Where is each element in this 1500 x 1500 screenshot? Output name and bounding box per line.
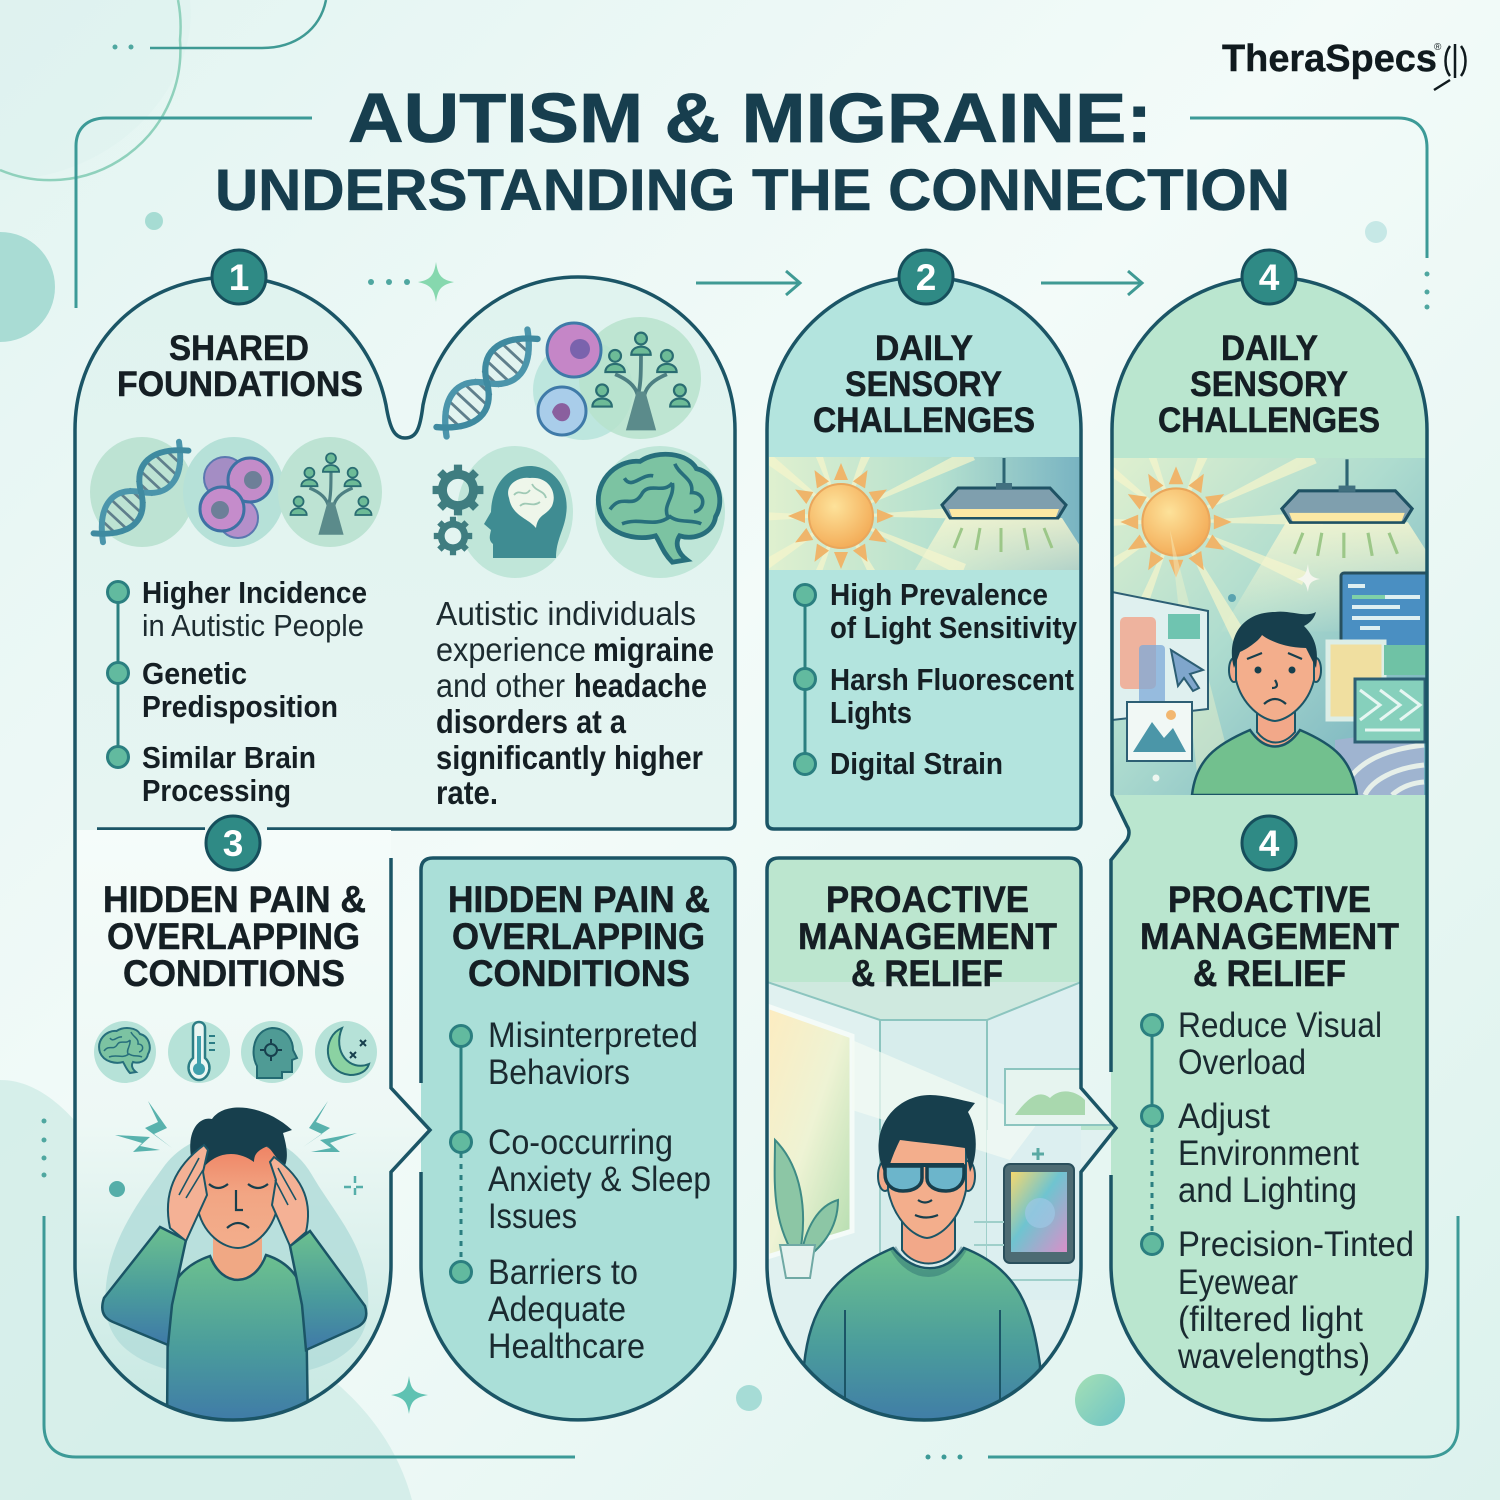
panel: daily sensory challenges text — [765, 277, 1083, 831]
badge: number 2 — [899, 250, 953, 304]
list: shared foundations: Similar Brain — [142, 740, 316, 775]
heading: hidden pain and overlapping conditions: CONDITIONS — [123, 953, 345, 994]
badge: number 3: 3 — [223, 823, 243, 864]
list: hidden pain: Issues — [488, 1197, 577, 1236]
heading: daily sensory challenges: DAILY — [1221, 329, 1318, 368]
list: hidden pain: Anxiety & Sleep — [488, 1160, 711, 1199]
text block: autistic individuals summary: significantly higher — [436, 739, 703, 776]
logo: TheraSpecs: ® — [1434, 42, 1442, 53]
text block: autistic individuals summary: Autistic individuals — [436, 595, 696, 632]
heading: hidden pain and overlapping conditions: HIDDEN PAIN & — [103, 879, 366, 920]
text block: autistic individuals summary: migraine — [593, 631, 714, 668]
heading: daily sensory challenges: DAILY — [875, 329, 973, 368]
icon: moon and stars — [315, 1021, 377, 1083]
icon: DNA circle — [86, 434, 196, 550]
list: proactive management: (filtered light — [1178, 1300, 1363, 1339]
arrow — [1041, 271, 1142, 295]
list: sensory challenges: Harsh Fluorescent — [830, 662, 1074, 697]
arrow — [696, 271, 800, 295]
heading: daily sensory challenges: CHALLENGES — [1158, 401, 1380, 440]
list: hidden pain: Behaviors — [488, 1053, 630, 1092]
list: sensory challenges: Digital Strain — [830, 746, 1003, 781]
heading: shared foundations — [117, 329, 363, 404]
list: hidden pain: Misinterpreted — [488, 1016, 698, 1055]
heading: daily sensory challenges: SENSORY — [1190, 365, 1348, 404]
heading: shared foundations: FOUNDATIONS — [117, 365, 363, 404]
badge: number 2: 2 — [916, 257, 936, 298]
heading: proactive management and relief: & RELIEF — [851, 953, 1003, 994]
heading: daily sensory challenges: CHALLENGES — [813, 401, 1035, 440]
badge: number 4: 4 — [1259, 257, 1280, 298]
illustration: sun and fluorescent lamp — [769, 457, 1079, 570]
heading: hidden pain and overlapping conditions: OVERLAPPING — [107, 916, 360, 957]
list: shared foundations: Genetic — [142, 656, 247, 691]
icon: family tree circle — [278, 437, 382, 547]
list: shared foundations: in Autistic People — [142, 608, 364, 643]
heading: hidden pain and overlapping conditions: CONDITIONS — [468, 953, 690, 994]
list: proactive management: Environment — [1178, 1134, 1359, 1173]
panel: shared foundations — [75, 277, 735, 830]
heading: hidden pain and overlapping conditions — [448, 879, 710, 994]
icon: brain circle — [595, 446, 725, 578]
badge: number 1 — [212, 250, 266, 304]
title: AUTISM & MIGRAINE: — [348, 79, 1152, 157]
icon: DNA large — [428, 322, 546, 444]
text block: autistic individuals summary — [436, 595, 714, 811]
heading: daily sensory challenges: SENSORY — [845, 365, 1002, 404]
list: proactive management: Overload — [1178, 1043, 1306, 1082]
illustration: calm person in tinted glasses — [767, 982, 1120, 1430]
panel: hidden pain illustration (white) — [75, 830, 430, 1425]
list: proactive management: and Lighting — [1178, 1171, 1357, 1210]
heading: proactive management and relief: MANAGEMENT — [1140, 916, 1399, 957]
list: shared foundations: Predisposition — [142, 689, 338, 724]
panel: hidden pain list (teal) — [421, 858, 735, 1420]
list: hidden pain: Healthcare — [488, 1327, 645, 1366]
list: hidden pain: Adequate — [488, 1290, 626, 1329]
heading: proactive management and relief: PROACTIVE — [1168, 879, 1371, 920]
icon: head with gears — [422, 446, 573, 578]
list: proactive management — [1142, 1006, 1414, 1376]
list: proactive management: Reduce Visual — [1178, 1006, 1382, 1045]
list: proactive management: Precision-Tinted — [1178, 1225, 1414, 1264]
list: sensory challenges — [794, 577, 1078, 781]
heading: hidden pain and overlapping conditions: OVERLAPPING — [452, 916, 705, 957]
heading: shared foundations: SHARED — [169, 329, 309, 368]
decorative background blobs — [0, 0, 412, 1500]
logo: TheraSpecs: TheraSpecs — [1222, 38, 1437, 80]
list: shared foundations — [108, 575, 367, 808]
list: shared foundations: Processing — [142, 773, 291, 808]
heading: proactive management and relief — [798, 879, 1057, 994]
list: hidden pain: Barriers to — [488, 1253, 638, 1292]
list: sensory challenges: High Prevalence — [830, 577, 1048, 612]
badge: number 4 — [1242, 250, 1296, 304]
text block: autistic individuals summary: and other — [436, 667, 565, 704]
title: UNDERSTANDING THE CONNECTION — [215, 158, 1290, 223]
list: hidden pain — [450, 1016, 711, 1366]
heading: hidden pain and overlapping conditions — [103, 879, 366, 994]
badge: number 3 — [206, 816, 260, 870]
panel: proactive management list (green column) — [1109, 278, 1429, 1422]
text block: autistic individuals summary: rate. — [436, 774, 498, 811]
illustration: overwhelmed person among screens — [1114, 458, 1426, 795]
icon: thermometer — [168, 1021, 230, 1083]
icon: brain — [94, 1021, 156, 1083]
heading: proactive management and relief — [1140, 879, 1399, 994]
text block: autistic individuals summary: headache — [574, 667, 707, 704]
icon: genes and family tree cluster — [533, 317, 701, 440]
text block: autistic individuals summary: experience — [436, 631, 586, 668]
badge: number 4 lower: 4 — [1259, 823, 1280, 864]
illustration: person with migraine — [102, 1101, 368, 1425]
list: hidden pain: Co-occurring — [488, 1123, 673, 1162]
heading: daily sensory challenges — [1158, 329, 1380, 440]
panel: proactive management illustration — [767, 858, 1120, 1430]
list: shared foundations: Higher Incidence — [142, 575, 367, 610]
badge: number 4 lower — [1242, 816, 1296, 870]
text block: autistic individuals summary: disorders at a — [436, 703, 627, 740]
heading: proactive management and relief: & RELIEF — [1193, 953, 1346, 994]
list: proactive management: Eyewear — [1178, 1263, 1298, 1302]
list: sensory challenges: of Light Sensitivity — [830, 610, 1078, 645]
heading: hidden pain and overlapping conditions: HIDDEN PAIN & — [448, 879, 710, 920]
title — [215, 79, 1290, 223]
icon: cells circle — [183, 437, 285, 547]
list: proactive management: Adjust — [1178, 1097, 1270, 1136]
icon: head with sun — [241, 1021, 303, 1083]
heading: proactive management and relief: MANAGEMENT — [798, 916, 1057, 957]
heading: proactive management and relief: PROACTIVE — [826, 879, 1029, 920]
list: proactive management: wavelengths) — [1177, 1337, 1370, 1376]
list: sensory challenges: Lights — [830, 695, 912, 730]
badge: number 1: 1 — [229, 257, 249, 298]
heading: daily sensory challenges — [813, 329, 1035, 440]
